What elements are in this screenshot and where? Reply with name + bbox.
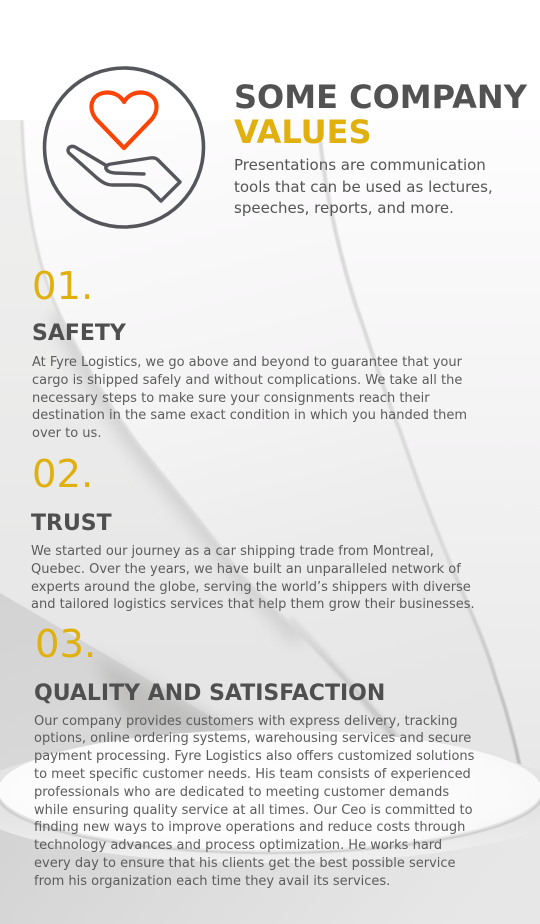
subtitle	[234, 156, 493, 217]
section 03: quality and satisfaction	[34, 622, 474, 889]
title: VALUES	[234, 113, 372, 151]
quality text	[34, 714, 474, 889]
number 03: 03.	[35, 622, 96, 667]
shadow along the main petal	[59, 313, 300, 640]
quality text: finding new ways to improve operations and reduce costs through	[34, 820, 465, 835]
safety text: over to us.	[32, 426, 101, 441]
trust text: experts around the globe, serving the world’s shippers with diverse	[31, 580, 471, 595]
title: SOME COMPANY	[234, 78, 527, 116]
icon: hand holding heart	[42, 66, 206, 229]
safety text: cargo is shipped safely and without complications. We take all the	[32, 373, 462, 388]
quality text: every day to ensure that his clients get the best possible service	[34, 856, 456, 871]
quality text: technology advances and process optimization. He works hard	[34, 838, 442, 853]
quality text: to meet specific customer needs. His team consists of experienced	[34, 767, 471, 782]
safety text	[32, 355, 467, 441]
trust text: Quebec. Over the years, we have built an unparalleled network of	[31, 562, 461, 577]
quality text: from his organization each time they avail its services.	[34, 874, 390, 889]
number 02: 02.	[32, 452, 93, 497]
title	[234, 78, 528, 151]
quality text: while ensuring quality service at all times. Our Ceo is committed to	[34, 803, 473, 818]
trust text: We started our journey as a car shipping trade from Montreal,	[31, 544, 434, 559]
subtitle: Presentations are communication	[234, 156, 486, 174]
safety text: destination in the same exact condition in which you handed them	[32, 408, 467, 423]
safety text: At Fyre Logistics, we go above and beyond to guarantee that your	[32, 355, 462, 370]
subtitle: tools that can be used as lectures,	[234, 178, 493, 196]
trust text: and tailored logistics services that help them grow their businesses.	[31, 597, 475, 612]
quality text: options, online ordering systems, warehousing services and secure	[34, 731, 471, 746]
heading: quality and satisfaction: QUALITY AND SATISFACTION	[34, 681, 385, 706]
subtitle: speeches, reports, and more.	[234, 199, 454, 217]
heading: safety: SAFETY	[32, 321, 126, 346]
quality text: professionals who are dedicated to meeting customer demands	[34, 785, 449, 800]
heading: trust: TRUST	[31, 511, 112, 536]
section 02: trust	[31, 452, 475, 612]
quality text: payment processing. Fyre Logistics also offers customized solutions	[34, 749, 474, 764]
safety text: necessary steps to make sure your consignments reach their	[32, 391, 430, 406]
number 01: 01.	[32, 264, 93, 309]
quality text: Our company provides customers with express delivery, tracking	[34, 714, 458, 729]
section 01: safety	[32, 264, 467, 441]
trust text	[31, 544, 475, 612]
